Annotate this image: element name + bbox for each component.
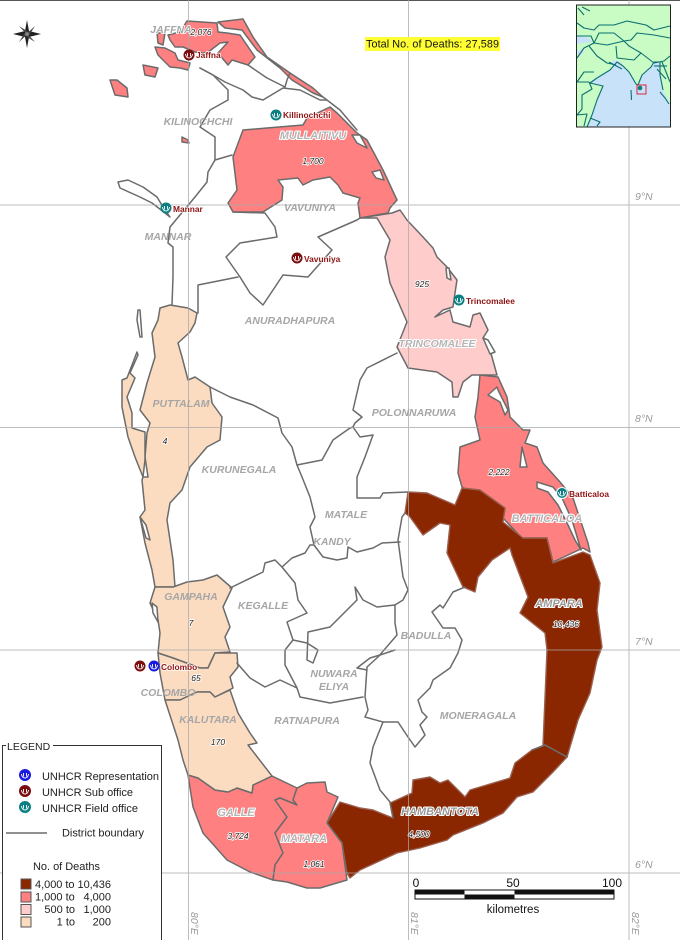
death count labels: [163, 27, 579, 869]
district name labels: MATALE: [325, 509, 368, 521]
death count labels: 7: [189, 618, 194, 628]
district name labels: KEGALLE: [238, 600, 289, 612]
district name labels: [141, 24, 583, 845]
district name labels: PUTTALAM: [153, 398, 210, 410]
scale bar: [413, 876, 622, 916]
district: Galle: [188, 775, 297, 880]
legend: field office: UNHCR Field office: [42, 803, 138, 815]
graticule labels: 6°N: [635, 859, 653, 871]
icon: Jaffna sub office: [184, 50, 194, 60]
icon: Trincomalee field office: [454, 294, 464, 306]
inset: country borders: [577, 7, 670, 127]
district name labels: MANNAR: [145, 231, 192, 243]
legend: sub office: [19, 785, 133, 799]
icon: Colombo representation: [148, 660, 160, 672]
legend: deaths classes: 4,000: [83, 892, 111, 904]
district name labels: RATNAPURA: [274, 715, 340, 727]
total deaths callout: Total No. of Deaths: 27,589: [366, 38, 499, 50]
death count labels: 925: [415, 279, 429, 289]
district name labels: MATARA: [281, 833, 327, 845]
label: Jaffna: Jaffna: [196, 50, 221, 60]
district name labels: VAVUNIYA: [284, 202, 336, 214]
graticule labels: 8°N: [635, 413, 653, 425]
district name labels: TRINCOMALEE: [398, 338, 476, 350]
legend: district boundary: [6, 828, 144, 840]
graticule labels: [188, 191, 653, 936]
unaffected district boundaries: [118, 65, 567, 818]
inset: inland seas: [577, 36, 622, 67]
district name labels: JAFFNA: [150, 24, 192, 36]
district name labels: ANURADHAPURA: [244, 315, 335, 327]
graticule labels: 82°E: [629, 912, 641, 936]
legend: district boundary: District boundary: [62, 828, 144, 840]
district name labels: AMPARA: [534, 598, 583, 610]
icon: Batticaloa field office: [556, 488, 568, 498]
district: Jaffna: [110, 19, 323, 143]
legend: deaths classes: 1,000 to: [35, 892, 75, 904]
icon: Killinochchi field office: [270, 110, 282, 120]
label: Killinochchi: Killinochchi: [283, 110, 330, 120]
legend: sub office: UNHCR Sub office: [42, 787, 133, 799]
icon: north arrow compass: [13, 20, 41, 48]
inset: Indian Ocean: [587, 62, 670, 127]
legend: field office: [19, 801, 138, 815]
legend: deaths classes: [21, 861, 111, 928]
district name labels: KURUNEGALA: [202, 464, 276, 476]
district name labels: KALUTARA: [179, 714, 237, 726]
district name labels: KANDY: [313, 536, 352, 548]
death count labels: 65: [191, 673, 201, 683]
label: Mannar: Mannar: [173, 204, 204, 214]
icon: Colombo sub office: [134, 660, 146, 672]
map: Sri Lanka districts: [110, 19, 602, 888]
legend: deaths classes: No. of Deaths: [33, 861, 100, 873]
legend: deaths classes: 1,000: [83, 904, 111, 916]
district name labels: POLONNARUWA: [372, 407, 456, 419]
district name labels: KILINOCHCHI: [164, 116, 233, 128]
district: Batticaloa: [458, 375, 590, 562]
death count labels: 3,724: [227, 831, 249, 841]
icon: Mannar field office: [160, 202, 172, 214]
district name labels: NUWARA: [310, 668, 358, 680]
district: Matara: [273, 782, 347, 888]
legend panel: LEGEND: [7, 741, 51, 753]
office markers: [134, 50, 609, 672]
district: Ampara: [405, 488, 602, 757]
district: Kalutara: [165, 690, 272, 793]
label: Vavuniya: Vavuniya: [304, 254, 341, 264]
inset: Sri Lanka location box: [637, 85, 646, 94]
death count labels: 1,700: [302, 156, 324, 166]
district: Colombo: [158, 653, 238, 700]
death count labels: 2,076: [189, 27, 212, 37]
icon: Vavuniya sub office: [292, 252, 302, 264]
legend: deaths classes: 200: [93, 916, 111, 928]
graticule labels: 9°N: [635, 191, 653, 203]
legend: deaths classes: 4,000 to 10,436: [35, 879, 111, 891]
scale bar: kilometres: [487, 904, 539, 916]
scale bar: 50: [506, 876, 520, 890]
district name labels: BATTICALOA: [512, 513, 582, 525]
death count labels: 10,436: [553, 619, 579, 629]
label: Colombo: Colombo: [161, 662, 197, 672]
district name labels: COLOMBO: [141, 687, 195, 699]
district name labels: ELIYA: [319, 681, 349, 693]
scale bar: 100: [602, 876, 622, 890]
graticule labels: 7°N: [635, 636, 653, 648]
district name labels: BADULLA: [401, 630, 451, 642]
graticule labels: 81°E: [408, 912, 420, 936]
district: Hambantota: [327, 745, 567, 878]
district name labels: HAMBANTOTA: [401, 806, 479, 818]
death count labels: 1,061: [303, 859, 325, 869]
legend: deaths classes: 500 to: [44, 904, 75, 916]
scale bar: 0: [413, 876, 420, 890]
death count labels: 170: [211, 737, 225, 747]
district name labels: GAMPAHA: [164, 591, 218, 603]
district: Mullaitivu: [228, 107, 397, 218]
district name labels: MONERAGALA: [440, 710, 516, 722]
legend panel: [2, 740, 162, 940]
death count labels: 4: [163, 436, 168, 446]
label: Batticaloa: Batticaloa: [569, 489, 609, 499]
district name labels: GALLE: [217, 807, 255, 819]
district name labels: MULLAITIVU: [280, 130, 347, 142]
district: Trincomalee: [360, 210, 497, 397]
district: Gampaha: [150, 575, 232, 668]
death count labels: 2,222: [487, 467, 510, 477]
legend: deaths classes: 1 to: [57, 916, 75, 928]
inset locator map: [576, 5, 670, 127]
label: Trincomalee: Trincomalee: [466, 296, 515, 306]
district: Puttalam: [122, 305, 222, 587]
legend: representation: UNHCR Representation: [42, 771, 159, 783]
death count labels: 4,500: [408, 829, 430, 839]
graticule labels: 80°E: [188, 912, 200, 936]
